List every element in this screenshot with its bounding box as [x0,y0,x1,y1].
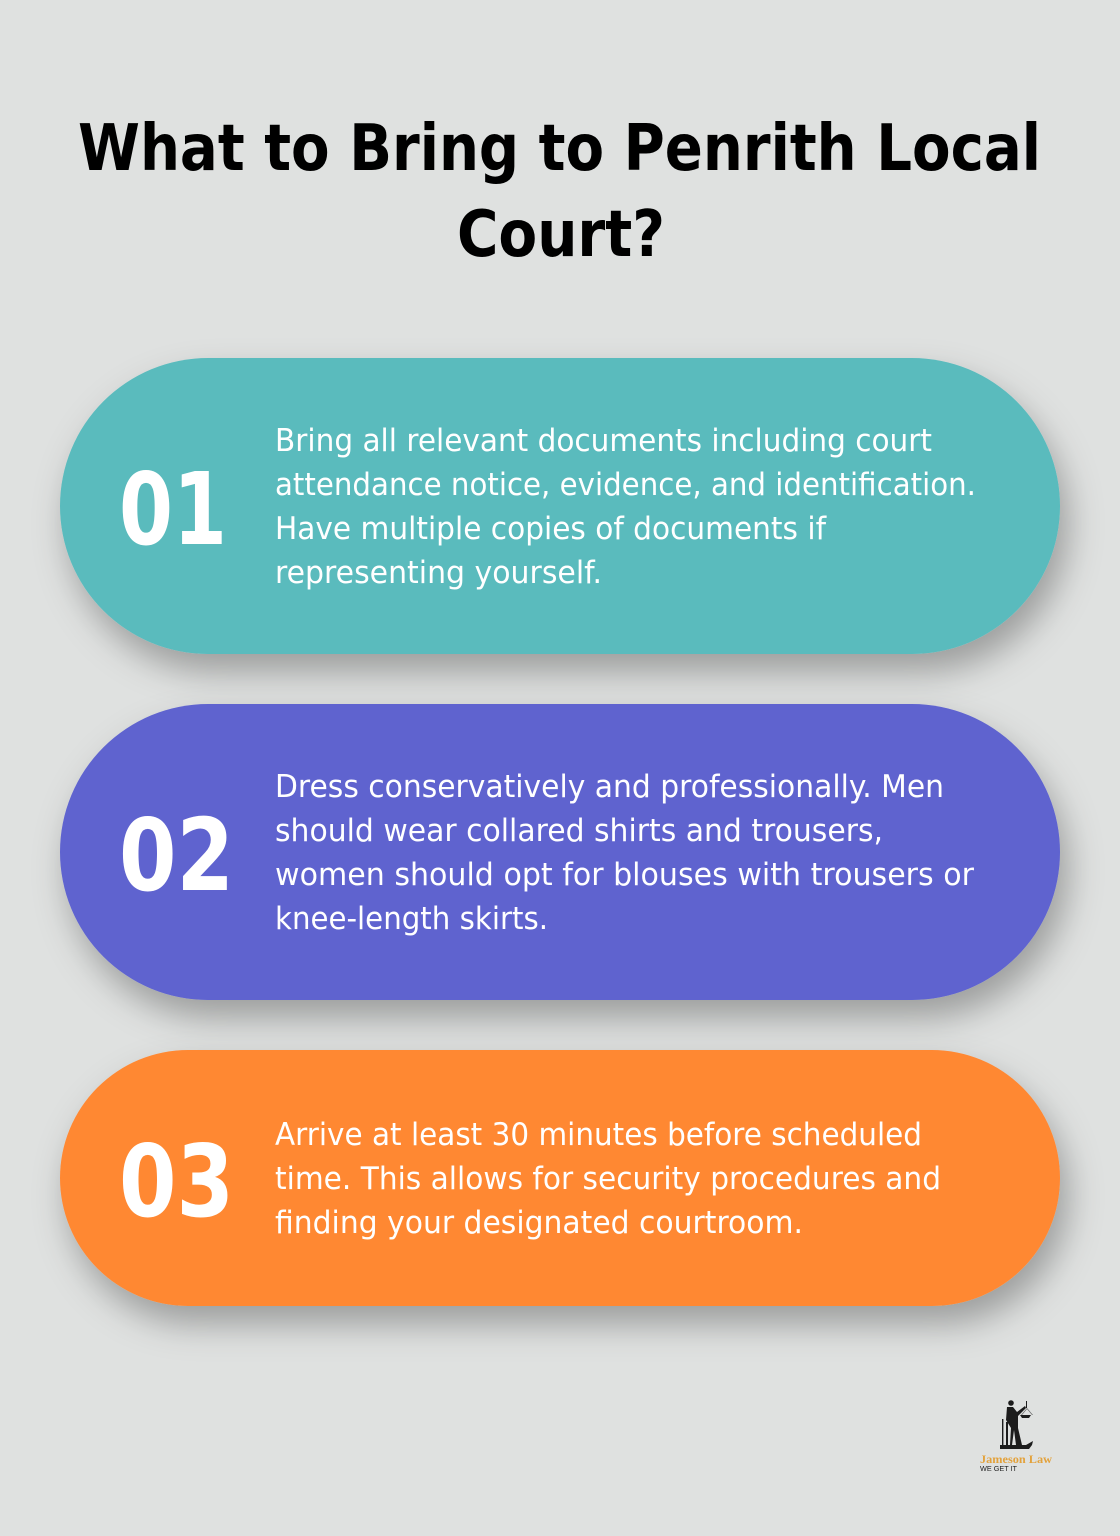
icon: lady justice with L [1000,1400,1033,1449]
text block 02: Dress conservatively and professionally. Men [275,769,944,805]
title [78,112,1041,272]
panel: step 03 arrival [60,1050,1060,1306]
panel: step 02 dress [60,704,1060,1000]
text block 01: Bring all relevant documents including court [275,423,932,459]
text block 02: women should opt for blouses with trousers or [275,857,974,893]
text block 03: time. This allows for security procedures and [275,1161,941,1197]
tagline: WE GET IT [980,1466,1018,1473]
text block 02: should wear collared shirts and trousers, [275,813,883,849]
pill background 02 [60,704,1060,1000]
text block 01 [275,423,976,591]
text block 01: Have multiple copies of documents if [275,511,827,547]
text block 01: attendance notice, evidence, and identification. [275,467,976,503]
number 02: 02 [119,797,234,914]
text block 01: representing yourself. [275,555,602,591]
text block 02: knee-length skirts. [275,901,548,937]
text block 03: Arrive at least 30 minutes before scheduled [275,1117,922,1153]
number 01: 01 [119,451,227,568]
pill background 01 [60,358,1060,654]
text block 02 [275,769,974,937]
pill background 03 [60,1050,1060,1306]
panel: step 01 documents [60,358,1060,654]
title: Court? [457,198,665,272]
brand name: Jameson Law [980,1454,1053,1466]
logo: Jameson Law [980,1400,1053,1473]
number 03: 03 [119,1123,234,1240]
text block 03: finding your designated courtroom. [275,1205,803,1241]
text block 03 [275,1117,941,1241]
